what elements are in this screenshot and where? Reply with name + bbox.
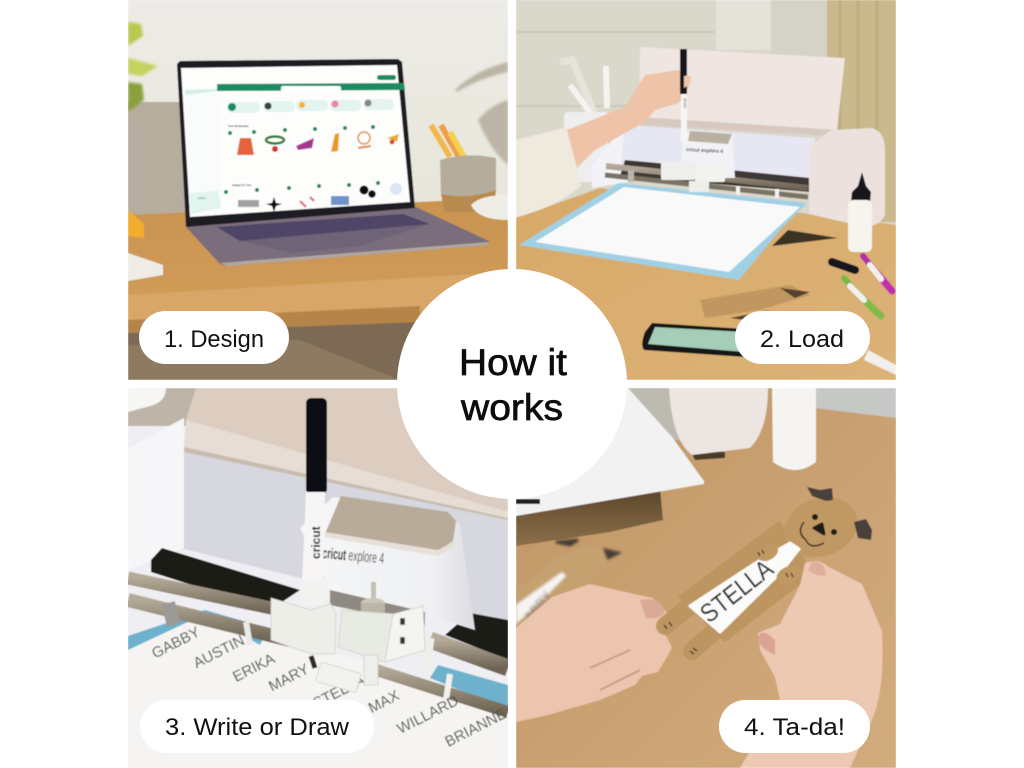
bookmark icons	[237, 132, 399, 155]
written names: BRIANNE	[442, 705, 510, 751]
dog face	[800, 514, 837, 546]
written names: STELLA	[310, 672, 368, 712]
pencil cup	[431, 125, 496, 213]
second bookmark	[516, 540, 618, 630]
name label	[690, 543, 799, 632]
right hand	[740, 561, 883, 768]
written names: GABBY	[149, 624, 203, 662]
written names: AUSTIN	[191, 632, 247, 672]
label: 1. Design	[139, 311, 289, 364]
glue bottle	[848, 172, 872, 252]
marker pen	[300, 398, 329, 605]
bookmark body	[679, 522, 805, 641]
title circle: how it works: works	[460, 387, 563, 428]
screen headings	[198, 124, 252, 200]
carriage housing	[300, 496, 475, 630]
machine dark slots	[151, 548, 508, 660]
books on desk	[128, 210, 163, 281]
machine rails	[128, 578, 508, 712]
written names	[149, 624, 510, 751]
cutting machine	[592, 47, 885, 227]
panel: step 2 load	[516, 0, 896, 380]
dish	[471, 195, 508, 220]
screen headings: cricut	[198, 196, 205, 200]
cup	[128, 388, 166, 412]
desk	[516, 188, 896, 380]
panel: step 4 ta-da	[516, 388, 896, 768]
arm and hand	[567, 70, 689, 168]
panel: step 3 write or draw	[128, 388, 510, 768]
dark gap under housing	[330, 590, 425, 625]
machine in background	[516, 388, 768, 516]
shadow below machine	[772, 230, 838, 246]
machine rails	[606, 166, 808, 188]
laptop	[177, 59, 489, 266]
markers on desk	[832, 256, 892, 316]
machine face	[621, 126, 816, 178]
machine right end	[809, 128, 885, 227]
written names: MAX	[366, 687, 402, 717]
screen headings: Images For You	[232, 183, 252, 187]
written names: ERIKA	[230, 650, 278, 686]
title circle: how it works	[397, 269, 627, 499]
laptop screen bezel	[177, 59, 415, 227]
tool jar	[560, 60, 608, 182]
carriage	[661, 131, 735, 192]
bookmark dots	[224, 125, 380, 194]
second bookmark: ABBY	[521, 587, 555, 624]
image icons	[238, 183, 402, 212]
label: 2. Load	[735, 311, 870, 364]
dog ears	[807, 487, 872, 540]
dog head	[776, 487, 866, 567]
icon: plant leaves	[128, 22, 158, 112]
silver knob	[361, 582, 385, 618]
machine lid	[184, 388, 508, 523]
glue bottle	[772, 388, 816, 470]
name text: STELLA	[694, 553, 779, 629]
machine left wall	[592, 125, 640, 188]
laptop base	[186, 207, 489, 266]
machine side wall	[169, 418, 185, 549]
label: 3. Write or Draw	[140, 700, 374, 753]
written names: WILLARD	[394, 692, 462, 738]
laptop screen display	[181, 65, 410, 217]
machine lid	[639, 47, 845, 130]
paper	[128, 614, 508, 768]
curtain	[827, 0, 896, 222]
label: 4. Ta-da!	[719, 700, 870, 753]
marker pen: cricut	[682, 98, 687, 108]
left hand	[516, 584, 672, 722]
bookmark: dog	[664, 487, 872, 654]
clamps a and b	[271, 598, 425, 693]
panel: step 1 design	[128, 0, 508, 380]
written names: MARY	[266, 661, 312, 695]
desk	[128, 198, 508, 380]
label: 4. Ta-da!: 4. Ta-da!	[744, 714, 845, 741]
shadow under machine	[516, 488, 663, 546]
title circle: how it works: How it	[459, 342, 568, 383]
marker pen	[680, 49, 687, 142]
sweater sleeve	[516, 127, 581, 217]
screen headings: Your Bookmarks	[228, 124, 249, 128]
machine face	[180, 452, 508, 630]
carriage: cricut explore 4	[686, 147, 723, 155]
marker pen: cricut	[309, 526, 323, 559]
bookmark paws	[664, 541, 806, 654]
mat	[519, 183, 807, 280]
label: 1. Design: 1. Design	[164, 326, 264, 353]
label: 3. Write or Draw: 3. Write or Draw	[165, 714, 350, 741]
infographic: how it works	[128, 0, 896, 768]
phone	[642, 323, 745, 357]
label: 2. Load: 2. Load	[760, 326, 844, 353]
model name: cricut explore 4	[322, 545, 385, 567]
